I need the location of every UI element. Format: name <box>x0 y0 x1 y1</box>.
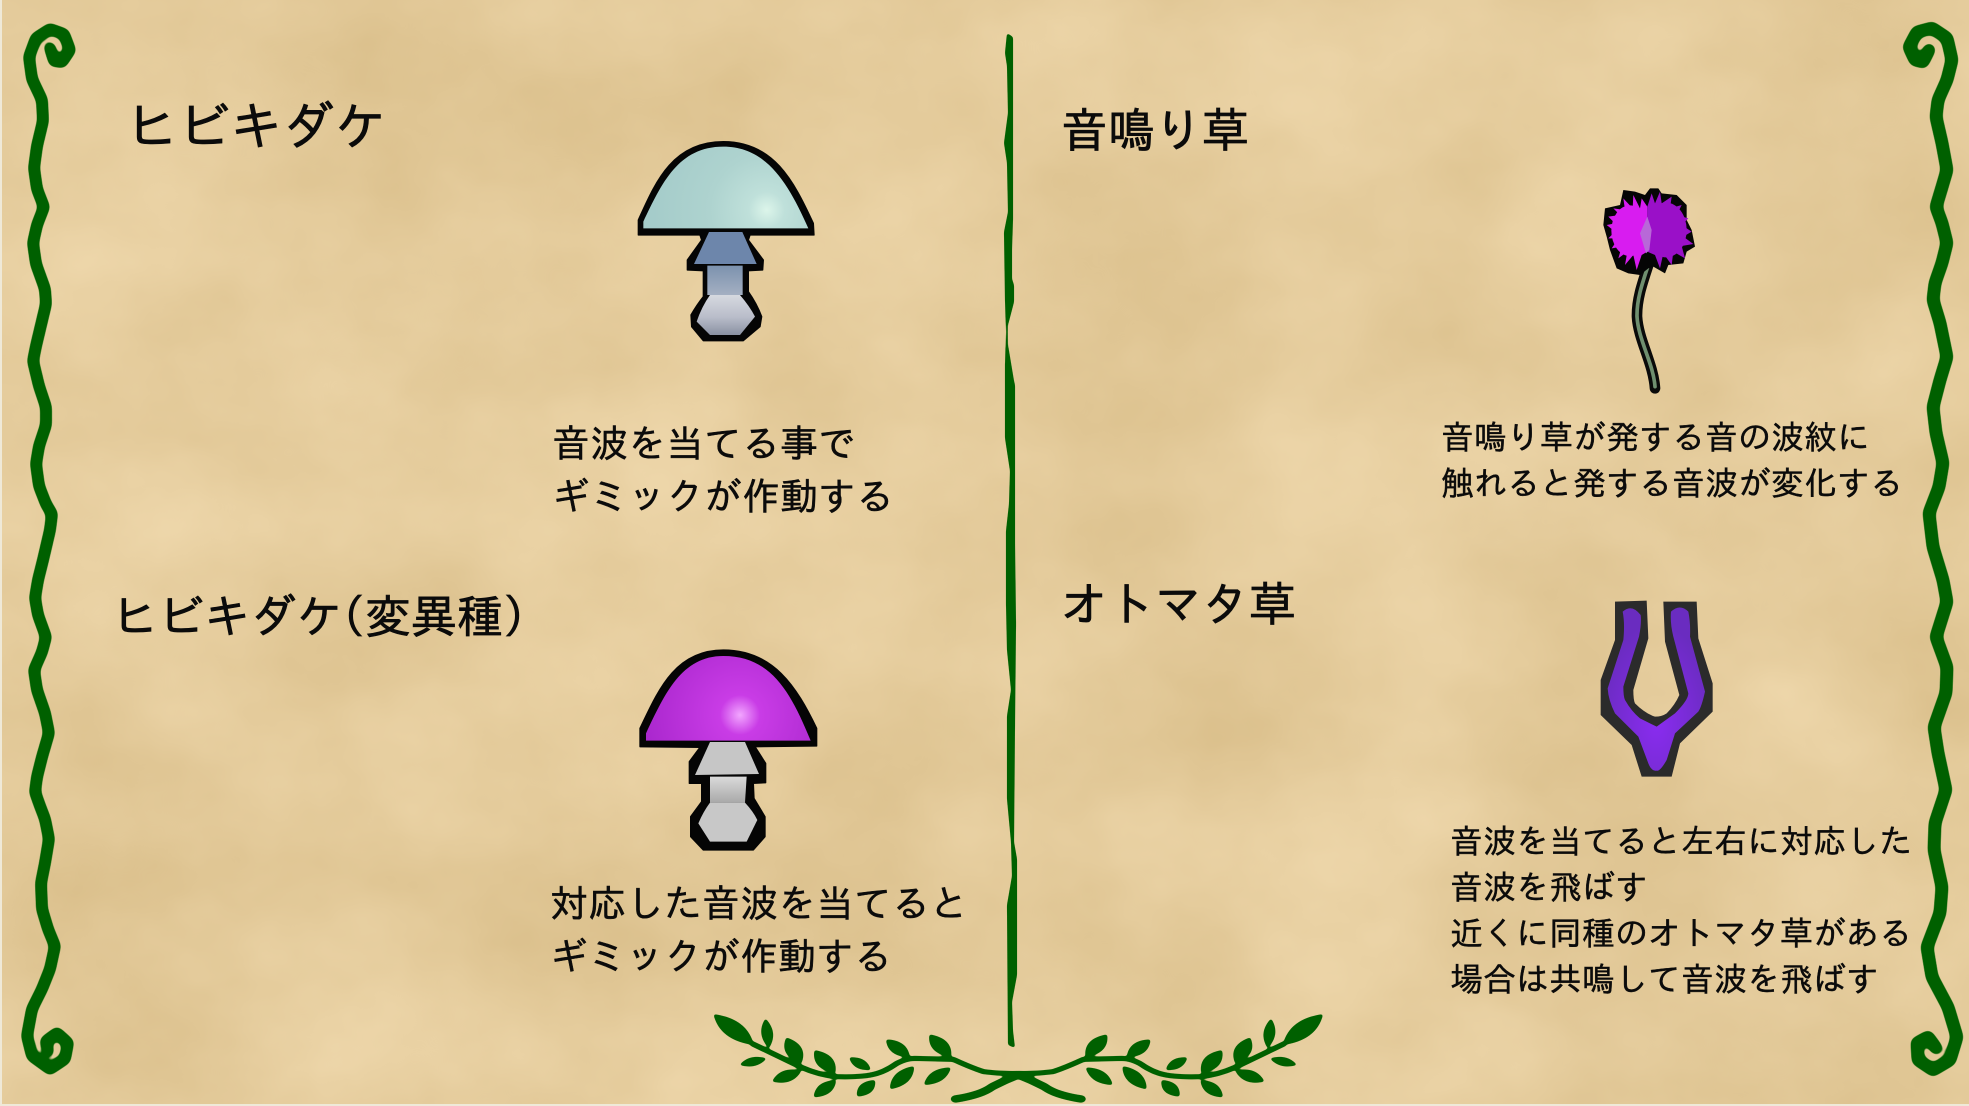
text: 変異種 description <box>550 884 968 975</box>
heading: ヒビキダケ(変異種): ヒビキダケ(変異種) <box>112 593 526 639</box>
illustration: purple fork plant (オトマタ草) <box>1601 601 1713 777</box>
text: 変異種 description: ギミックが作動する <box>550 937 892 975</box>
text: オトマタ草 description: 音波を当てると左右に対応した <box>1450 824 1912 857</box>
illustration: purple mushroom (ヒビキダケ 変異種) <box>640 650 817 850</box>
text: ヒビキダケ description <box>552 424 894 515</box>
text: 変異種 description: 対応した音波を当てると <box>550 884 968 922</box>
text: 音鳴り草 description <box>1441 420 1903 499</box>
text: 音鳴り草 description: 触れると発する音波が変化する <box>1441 466 1903 499</box>
central vine divider <box>1004 33 1017 1048</box>
illustration: pale blue mushroom (ヒビキダケ) <box>638 142 814 341</box>
text: オトマタ草 description: 場合は共鳴して音波を飛ばす <box>1450 962 1879 995</box>
text: オトマタ草 description <box>1450 824 1912 995</box>
bottom leaf garland <box>713 1014 1323 1099</box>
right vine border <box>1909 28 1957 1070</box>
text: オトマタ草 description: 音波を飛ばす <box>1450 870 1648 903</box>
heading: ヒビキダケ: ヒビキダケ <box>126 100 386 152</box>
text: 音鳴り草 description: 音鳴り草が発する音の波紋に <box>1441 420 1870 453</box>
text: ヒビキダケ description: ギミックが作動する <box>552 477 894 515</box>
left vine border <box>27 29 70 1069</box>
text: ヒビキダケ description: 音波を当てる事で <box>552 424 856 462</box>
heading: オトマタ草: オトマタ草 <box>1061 580 1296 627</box>
illustration: purple sound flower (音鳴り草) <box>1603 188 1695 388</box>
text: オトマタ草 description: 近くに同種のオトマタ草がある <box>1450 916 1912 949</box>
heading: 音鳴り草: 音鳴り草 <box>1061 106 1249 153</box>
